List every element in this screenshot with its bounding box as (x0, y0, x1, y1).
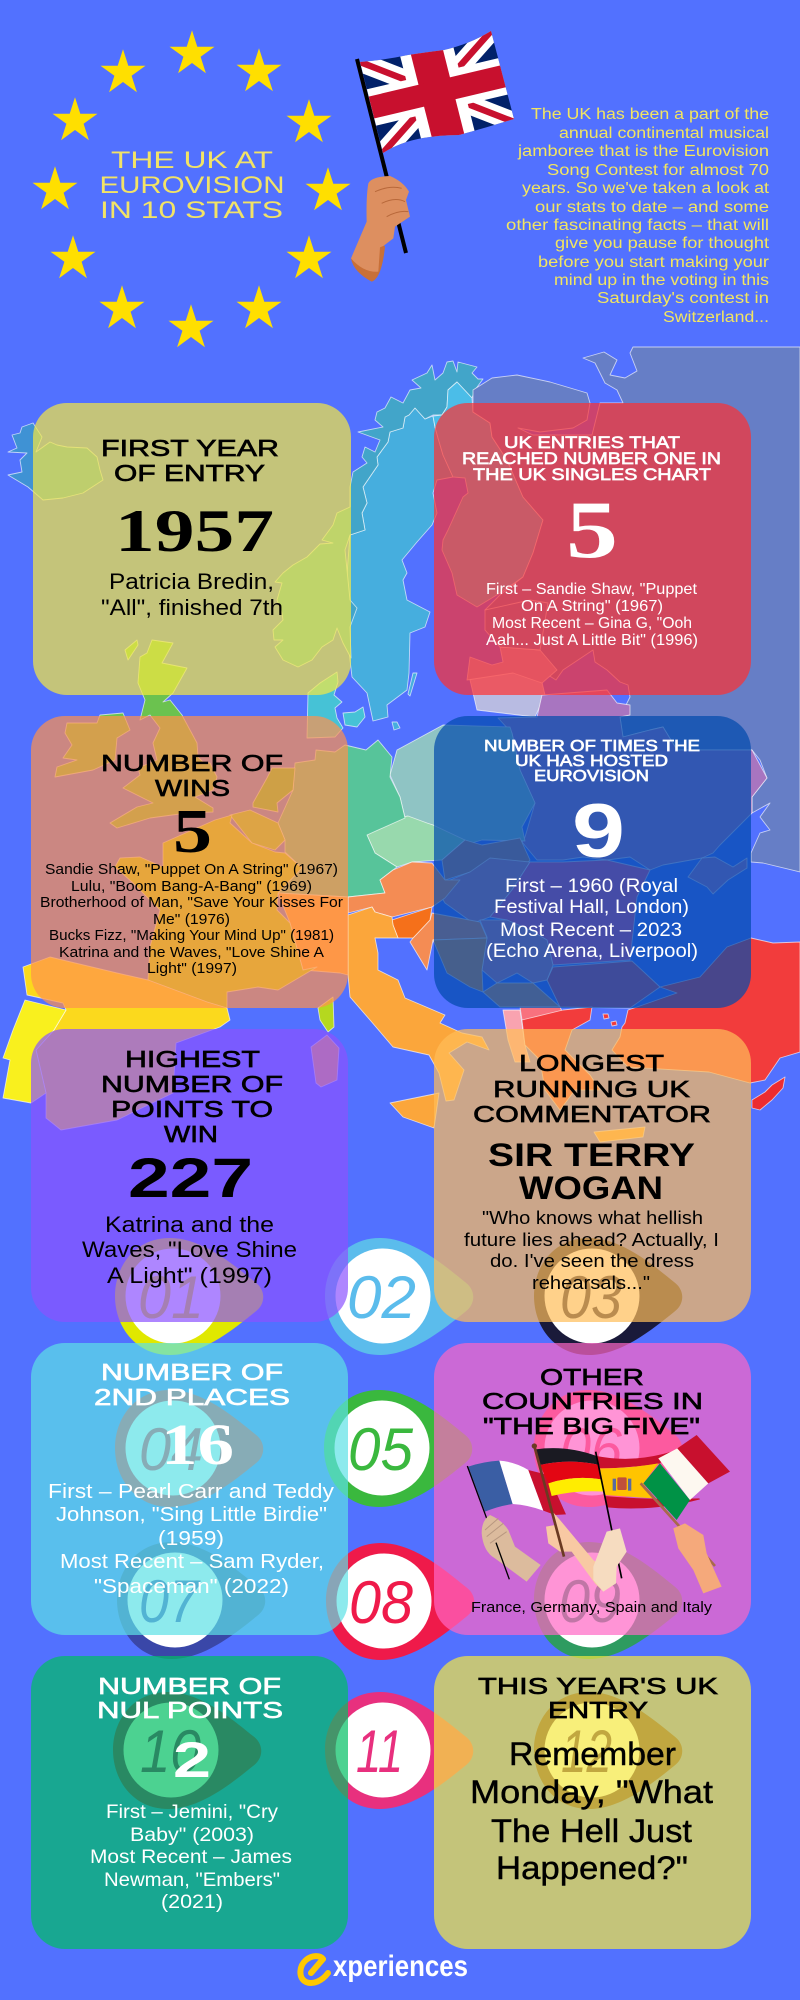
intro paragraph: before you start making your (538, 254, 769, 271)
caption: France, Germany, Spain and Italy (471, 1600, 713, 1616)
heading: ENTRY (548, 1697, 648, 1723)
heading: COMMENTATOR (473, 1101, 711, 1127)
name: WOGAN (519, 1170, 663, 1206)
details: Lulu, "Boom Bang-A-Bang" (1969) (71, 879, 312, 895)
details: Me" (1976) (153, 912, 230, 928)
heading: FIRST YEAR (101, 435, 279, 461)
heading (97, 1673, 283, 1723)
heading: 2ND PLACES (94, 1384, 290, 1410)
title: EUROVISION (100, 172, 284, 199)
number marker 02: 02 (347, 1264, 416, 1331)
stat: 9 (572, 789, 625, 874)
heading (101, 435, 279, 486)
title (100, 147, 284, 224)
name: SIR TERRY (488, 1137, 695, 1173)
number marker 02 (325, 1238, 473, 1355)
details: First – Sandie Shaw, "Puppet (486, 581, 698, 598)
number marker 09 (534, 1542, 682, 1659)
details: Light" (1997) (147, 961, 237, 977)
panel: nul points (31, 1656, 348, 1949)
heading: THE UK SINGLES CHART (473, 465, 711, 484)
heading (101, 1046, 283, 1147)
panel: times hosted (434, 716, 751, 1008)
heading: NUMBER OF TIMES THE (484, 738, 700, 755)
details: "Spaceman" (2022) (94, 1575, 289, 1598)
quote: future lies ahead? Actually, I (464, 1230, 719, 1250)
number marker 07 (117, 1542, 265, 1659)
panel: the big five (434, 1343, 751, 1635)
details: Newman, "Embers" (104, 1869, 280, 1891)
details: Waves, "Love Shine (82, 1237, 297, 1262)
details: Happened?" (496, 1850, 688, 1886)
details: Johnson, "Sing Little Birdie" (56, 1503, 327, 1526)
heading: "THE BIG FIVE" (483, 1413, 700, 1439)
stat: 5 (173, 798, 212, 866)
icon: hand waving UK flag (351, 31, 514, 282)
details: Sandie Shaw, "Puppet On A String" (1967) (45, 862, 338, 878)
icon: hands waving four flags (467, 1435, 730, 1593)
heading: EUROVISION (534, 768, 649, 785)
number marker 10 (113, 1692, 261, 1809)
details (40, 862, 343, 977)
heading (94, 1359, 290, 1410)
details (82, 1212, 297, 1288)
details: On A String" (1967) (521, 598, 663, 615)
heading: OF ENTRY (114, 460, 265, 486)
details: Festival Hall, London) (494, 897, 689, 918)
intro paragraph: our stats to date – and some (535, 199, 769, 216)
intro paragraph: jamboree that is the Eurovision (517, 143, 769, 160)
details (486, 581, 698, 649)
intro paragraph: The UK has been a part of the (531, 106, 769, 123)
details: Patricia Bredin, (109, 569, 274, 594)
details: Most Recent – Sam Ryder, (60, 1550, 324, 1573)
number marker 10: 10 (140, 1718, 201, 1785)
intro paragraph: Song Contest for almost 70 (547, 162, 769, 179)
number marker 01 (115, 1238, 263, 1355)
number marker 04 (115, 1390, 263, 1507)
details (101, 569, 283, 620)
panel: second places (31, 1343, 348, 1635)
intro paragraph: Switzerland... (663, 309, 769, 326)
heading (462, 433, 721, 484)
intro paragraph: other fascinating facts – that will (506, 217, 769, 234)
details: (1959) (158, 1527, 224, 1550)
heading: REACHED NUMBER ONE IN (462, 449, 721, 468)
details: Aah... Just A Little Bit" (1996) (486, 632, 698, 649)
heading: OTHER (540, 1364, 644, 1390)
details (470, 1736, 713, 1886)
heading: THIS YEAR'S UK (478, 1673, 718, 1699)
logo: experiences: xperiences (333, 1950, 468, 1983)
intro paragraph: mind up in the voting in this (554, 272, 769, 289)
details: A Light" (1997) (107, 1263, 272, 1288)
number marker 09: 09 (559, 1568, 621, 1635)
number marker 05: 05 (348, 1416, 414, 1483)
quote: rehearsals..." (532, 1273, 650, 1293)
quote: "Who knows what hellish (482, 1208, 703, 1228)
number marker 03 (534, 1238, 682, 1355)
quote (464, 1208, 719, 1293)
details: "All", finished 7th (101, 595, 283, 620)
number marker 06 (534, 1390, 682, 1507)
number marker 08: 08 (349, 1569, 414, 1636)
details: First – 1960 (Royal (505, 876, 678, 897)
number marker 12: 12 (561, 1718, 612, 1785)
intro paragraph: give you pause for thought (555, 235, 770, 252)
details: Katrina and the Waves, "Love Shine A (59, 945, 324, 961)
heading: NUMBER OF (101, 1359, 283, 1385)
number marker 04: 04 (139, 1416, 203, 1483)
number marker 03: 03 (560, 1264, 622, 1331)
title: IN 10 STATS (100, 197, 283, 224)
quote: do. I've seen the dress (490, 1251, 694, 1271)
heading: COUNTRIES IN (482, 1388, 703, 1414)
intro paragraph: Saturday's contest in (597, 290, 769, 307)
details: Baby" (2003) (130, 1824, 254, 1846)
heading: HIGHEST (125, 1046, 260, 1072)
name (488, 1137, 695, 1206)
heading: NUL POINTS (97, 1697, 283, 1723)
details: Most Recent – Gina G, "Ooh (492, 615, 692, 632)
heading (101, 750, 283, 801)
stat: 1957 (115, 498, 274, 564)
details: The Hell Just (491, 1813, 692, 1849)
details: First – Pearl Carr and Teddy (48, 1480, 335, 1503)
heading: NUMBER OF (101, 750, 283, 776)
details: Brotherhood of Man, "Save Your Kisses For (40, 895, 343, 911)
details (90, 1801, 292, 1913)
details: Katrina and the (105, 1212, 274, 1237)
heading (473, 1050, 711, 1127)
details: (2021) (161, 1891, 223, 1913)
details: First – Jemini, "Cry (106, 1801, 278, 1823)
number marker 01: 01 (138, 1264, 204, 1331)
number marker 11: 11 (356, 1718, 403, 1785)
number marker 06: 06 (560, 1416, 623, 1483)
details: (Echo Arena, Liverpool) (486, 941, 698, 962)
stat: 2 (173, 1732, 211, 1788)
heading: UK HAS HOSTED (515, 753, 668, 770)
details (486, 876, 698, 962)
stat: 16 (161, 1412, 234, 1477)
details: Most Recent – 2023 (500, 920, 682, 941)
heading: UK ENTRIES THAT (504, 433, 680, 452)
number marker 08 (326, 1543, 474, 1660)
heading (478, 1673, 718, 1723)
heading: WINS (155, 775, 230, 801)
details: Remember (509, 1736, 676, 1772)
intro paragraph (506, 106, 770, 326)
heading: RUNNING UK (493, 1076, 690, 1102)
details: Monday, "What (470, 1774, 713, 1810)
heading: NUMBER OF (98, 1673, 281, 1699)
number marker 11 (325, 1692, 473, 1809)
panel: highest points (31, 1029, 348, 1322)
heading: LONGEST (519, 1050, 664, 1076)
heading: WIN (164, 1121, 218, 1147)
details: Most Recent – James (90, 1846, 292, 1868)
panel: this year's entry (434, 1656, 751, 1949)
stat: 5 (566, 484, 618, 575)
details (48, 1480, 335, 1598)
panel: longest running commentator (434, 1029, 751, 1322)
title: THE UK AT (111, 147, 273, 174)
map of Europe (3, 347, 800, 1142)
heading (484, 738, 700, 785)
panel: number of wins (31, 716, 348, 1008)
heading (482, 1364, 703, 1439)
heading: POINTS TO (111, 1096, 273, 1122)
number marker 05 (324, 1390, 472, 1507)
panel: number one singles (434, 403, 751, 695)
details: Bucks Fizz, "Making Your Mind Up" (1981) (49, 928, 334, 944)
emblem: ring of twelve stars (32, 30, 350, 347)
intro paragraph: years. So we've taken a look at (522, 180, 770, 197)
intro paragraph: annual continental musical (559, 125, 769, 142)
number marker 12 (534, 1692, 682, 1809)
heading: NUMBER OF (101, 1071, 283, 1097)
stat: 227 (128, 1146, 253, 1209)
number marker 07: 07 (139, 1568, 201, 1635)
panel: first year of entry (33, 403, 351, 695)
